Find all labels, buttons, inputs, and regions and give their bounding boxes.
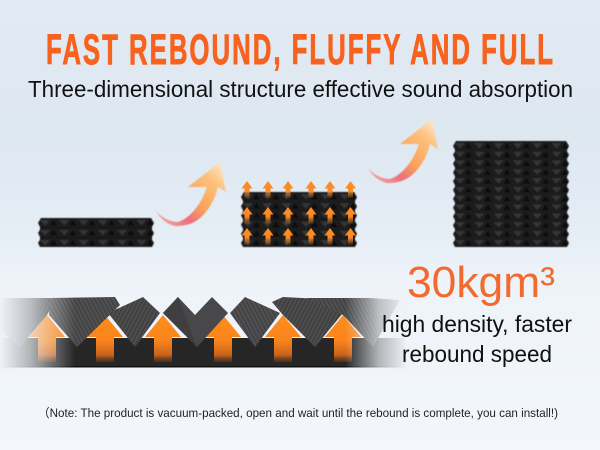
foam stack: expanding with orange arrows [241, 181, 357, 247]
density description [382, 311, 572, 367]
footnote: （Note: The product is vacuum-packed, open and wait until the rebound is complete, you can install!) [38, 406, 558, 420]
subtitle: Three-dimensional structure effective sound absorption [28, 76, 573, 102]
density figure: 30kgm³ [407, 259, 555, 307]
arrow: first rebound curve [156, 162, 226, 226]
foam stack: compressed [38, 218, 154, 247]
title: FAST REBOUND, FLUFFY AND FULL [46, 25, 553, 74]
arrow: second rebound curve [368, 119, 438, 183]
density description: rebound speed [402, 341, 552, 367]
foam cross-section with large orange arrows [0, 290, 407, 370]
foam stack: fully rebounded [453, 141, 569, 247]
density description: high density, faster [382, 311, 572, 337]
